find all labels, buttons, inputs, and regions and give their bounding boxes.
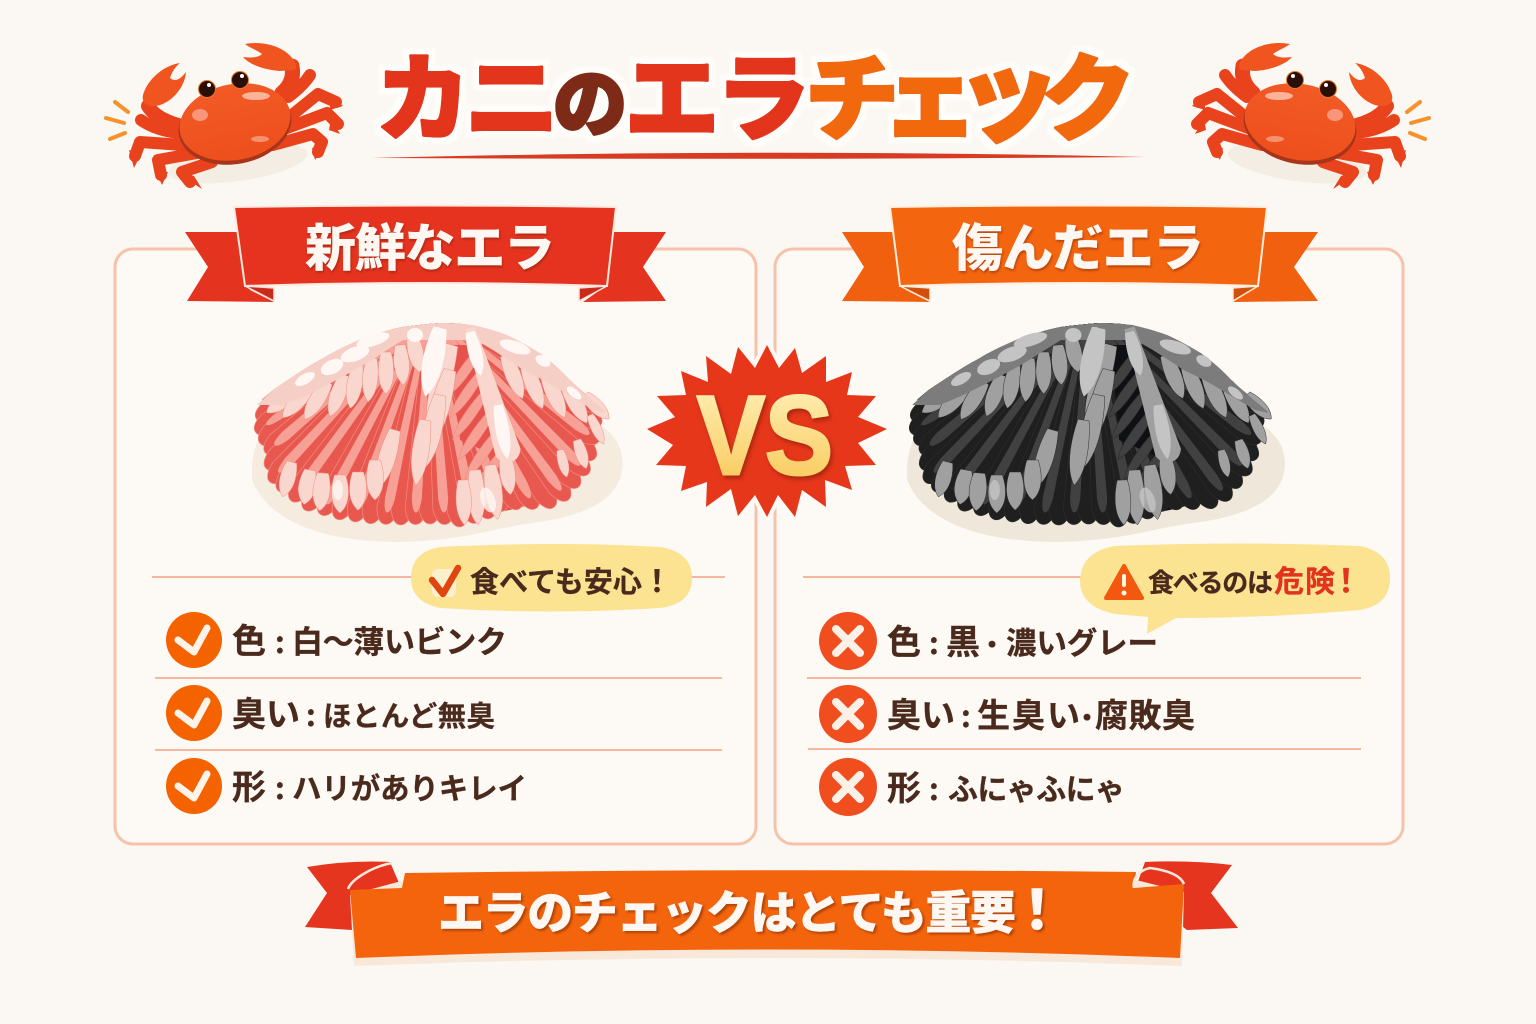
illustration: damaged gill	[904, 301, 1285, 542]
text: color: 濃いグレー	[1006, 619, 1158, 663]
title: ニ	[465, 47, 559, 152]
icon: check on callout	[432, 568, 458, 597]
icon: crab left	[106, 43, 343, 191]
title: ッ	[956, 39, 1060, 155]
text: color: 白〜薄いビンク	[292, 617, 507, 662]
text: smell: ほとんど無臭	[323, 694, 495, 735]
title: ク	[1041, 47, 1135, 152]
callout: dangerous to eat	[1080, 544, 1390, 634]
ribbon: fresh gills heading	[185, 206, 666, 302]
icon: check smell	[166, 685, 222, 741]
bottom banner	[305, 861, 1238, 966]
dividers: right list	[807, 678, 1361, 749]
text: color: 黒	[946, 615, 980, 664]
panel: damaged gills	[775, 249, 1403, 844]
text: shape: :	[929, 765, 939, 809]
heading: fresh gills: 新鮮なエラ	[305, 207, 555, 281]
text: color: 色	[232, 614, 266, 663]
title: の	[553, 63, 627, 146]
callout text: ！	[642, 557, 672, 601]
icon: cross smell	[819, 685, 877, 743]
icon: check shape	[166, 758, 222, 814]
title underline	[372, 153, 1146, 159]
text: shape: ふにゃふにゃ	[948, 765, 1125, 809]
icon: check color	[166, 612, 222, 668]
title	[376, 39, 1135, 155]
icon: cross color	[819, 612, 877, 670]
text: shape: :	[275, 764, 285, 808]
banner text: エラのチェックはとても重要	[438, 877, 1016, 943]
ribbon: damaged gills heading	[842, 206, 1318, 302]
text: smell: :	[961, 692, 971, 736]
title: エ	[625, 47, 719, 152]
title: チ	[805, 47, 899, 152]
panel: fresh gills	[115, 249, 756, 844]
text: color: ・	[979, 625, 1005, 662]
illustration: fresh gill	[249, 301, 623, 542]
icon: cross shape	[819, 758, 877, 816]
banner text: ！	[1010, 866, 1064, 945]
title: カ	[376, 47, 470, 152]
text: smell: ・	[1074, 698, 1100, 735]
callout: safe to eat	[411, 544, 692, 612]
icon: crab right	[1192, 43, 1429, 191]
text: color: 色	[887, 615, 921, 664]
list: fresh checks	[166, 612, 527, 814]
title: ラ	[716, 47, 810, 152]
title: ェ	[882, 46, 978, 153]
divider: right top	[803, 576, 1090, 578]
divider: left top	[152, 576, 725, 578]
callout text: danger: ！	[1330, 556, 1362, 602]
text: smell: 臭い	[887, 688, 955, 737]
dividers: left list	[155, 678, 722, 750]
text: color: :	[275, 618, 285, 662]
text: color: :	[929, 619, 939, 663]
VS badge	[647, 345, 887, 517]
callout text: danger: 危険	[1274, 557, 1335, 601]
list: damaged warnings	[819, 612, 1195, 816]
text: smell: 生臭い	[977, 689, 1080, 737]
text: shape: 形	[232, 760, 266, 809]
text: smell: :	[306, 691, 316, 735]
text: smell: 腐敗臭	[1095, 689, 1195, 737]
text: shape: ハリがありキレイ	[292, 766, 527, 808]
callout text: 食べても安心	[470, 559, 642, 601]
VS text: VS	[697, 373, 833, 498]
callout text: eat: 食べるのは	[1148, 563, 1273, 600]
text: shape: 形	[887, 761, 921, 810]
text: smell: 臭い	[232, 687, 300, 736]
heading: damaged gills: 傷んだエラ	[952, 207, 1204, 281]
icon: warning triangle	[1106, 566, 1142, 598]
